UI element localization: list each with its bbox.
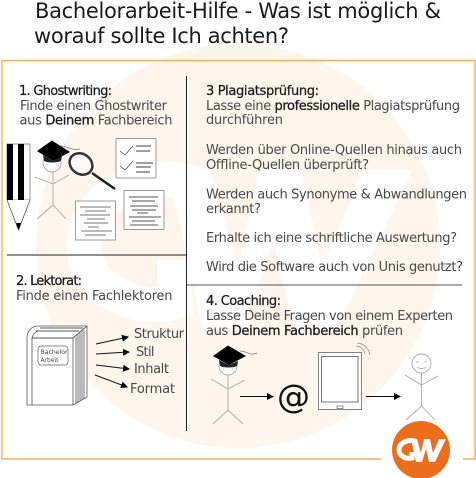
text: question online offline xyxy=(206,143,462,173)
icon: book: Bachelor xyxy=(40,348,68,356)
title xyxy=(34,0,441,48)
icon: happy figure xyxy=(405,354,438,420)
icon: document left xyxy=(76,201,116,240)
panel: ghostwriting xyxy=(7,84,172,240)
panel dividers xyxy=(7,76,462,431)
text: ghostwriting description: Finde einen Ghostwriter xyxy=(20,99,168,114)
panel: lektorat xyxy=(16,274,185,405)
label: Stil: Stil xyxy=(136,345,154,360)
text: question synonyms: Werden auch Synonyme & Abwandlungen xyxy=(206,188,467,202)
title: worauf sollte Ich achten? xyxy=(34,24,289,48)
icon: magnifying glass xyxy=(65,149,115,189)
icon: book: Arbeit xyxy=(40,356,59,364)
icon: pencil xyxy=(7,144,30,230)
arrow: tablet to figure xyxy=(366,396,400,398)
text: coaching description: Lasse Deine Fragen von einem Experten xyxy=(206,309,453,324)
icon: book xyxy=(27,326,87,405)
text: lektorat description: Finde einen Fachlektoren xyxy=(16,289,172,304)
text: question universities: Wird die Software auch von Unis genutzt? xyxy=(206,260,463,275)
icon: tablet xyxy=(318,343,370,410)
text: question online offline: Werden über Online-Quellen hinaus auch xyxy=(206,143,462,158)
icon: at sign: @ xyxy=(277,377,310,416)
text: question synonyms: erkannt? xyxy=(206,202,261,217)
heading: lektorat: 2. Lektorat: xyxy=(16,274,82,289)
label: Inhalt: Inhalt xyxy=(134,362,169,377)
icon: graduate figure xyxy=(211,346,257,424)
watermark logo xyxy=(36,44,440,448)
label: Struktur: Struktur xyxy=(134,327,185,342)
arrow: figure to at sign xyxy=(240,396,273,398)
text: question written report: Erhalte ich eine schriftliche Auswertung? xyxy=(206,231,457,246)
icon: checklist xyxy=(116,138,156,178)
text: coaching description: aus Deinem Fachbereich prüfen xyxy=(206,324,403,339)
arrow: to Stil xyxy=(96,352,129,354)
heading: plagiatsprüfung: 3 Plagiatsprüfung: xyxy=(206,84,319,99)
arrow: to Inhalt xyxy=(96,365,129,369)
text: plagiatsprüfung intro: Lasse eine professionelle Plagiatsprüfung xyxy=(206,99,460,114)
panel: plagiatsprüfung xyxy=(206,84,467,275)
icon: graduate figure xyxy=(35,140,80,219)
icon: document right xyxy=(124,190,164,230)
text: ghostwriting description xyxy=(20,99,172,128)
panel: coaching xyxy=(206,294,453,424)
heading: ghostwriting: 1. Ghostwriting: xyxy=(19,84,112,99)
arrow: to Struktur xyxy=(96,337,128,344)
text: question synonyms xyxy=(206,188,467,217)
text: coaching description xyxy=(206,309,453,339)
logo: GW badge xyxy=(392,421,450,478)
text: plagiatsprüfung intro: durchführen xyxy=(206,113,283,128)
text: question online offline: Offline-Quellen überprüft? xyxy=(206,158,369,173)
arrow: to Format xyxy=(95,375,127,387)
label: Format: Format xyxy=(130,382,175,397)
text: plagiatsprüfung intro xyxy=(206,99,460,128)
text: ghostwriting description: aus Deinem Fachbereich xyxy=(20,114,172,128)
heading: coaching: 4. Coaching: xyxy=(206,294,281,309)
